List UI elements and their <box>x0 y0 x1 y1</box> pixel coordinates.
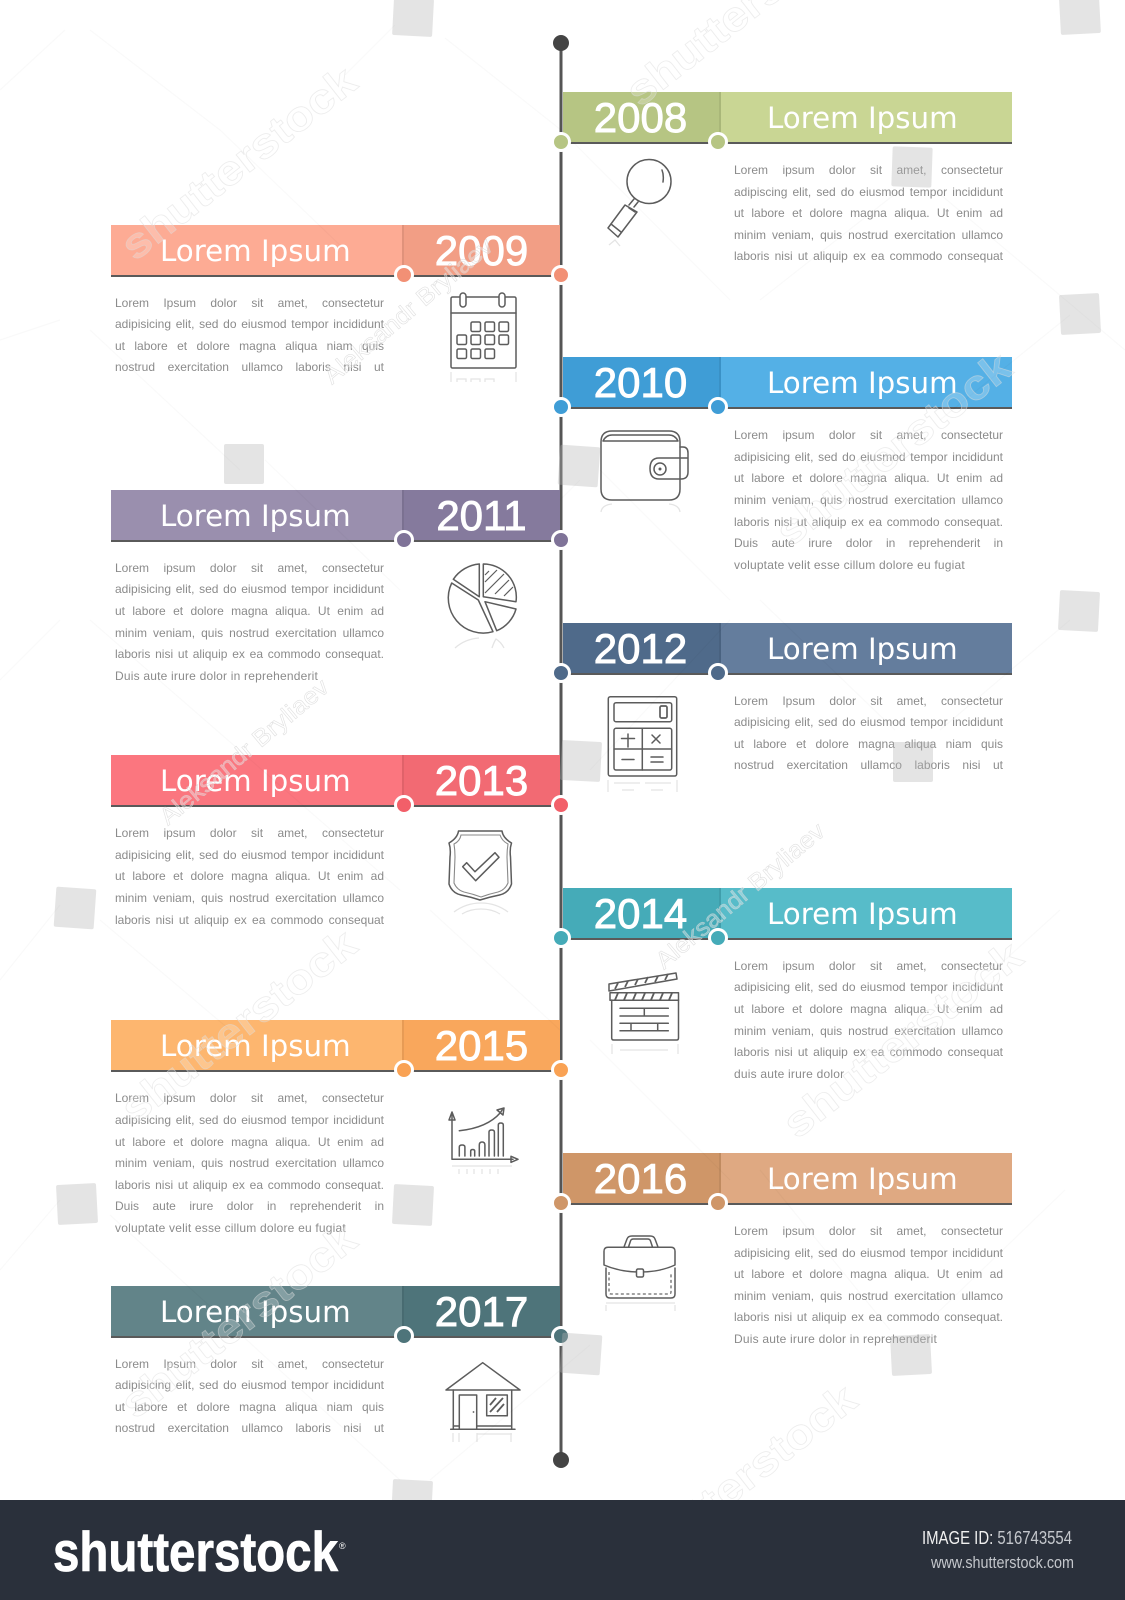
2015 body text: ut labore et dolore magna aliqua. Ut enim ad <box>115 1135 384 1149</box>
2015 divider marker <box>394 1060 414 1080</box>
2010 body text: minim veniam, quis nostrud exercitation ullamco <box>734 493 1003 507</box>
2016 axis marker <box>551 1193 571 1213</box>
2010 header band <box>562 357 1012 409</box>
2010 body text: laboris nisi ut aliquip ex ea commodo consequat. <box>734 515 1003 529</box>
2014 body text: adipisicing elit, sed do eiusmod tempor incididunt <box>734 980 1003 994</box>
2015 header band <box>110 1020 560 1072</box>
2009 body text: Lorem Ipsum dolor sit amet, consectetur <box>115 296 384 310</box>
2011 header band: 2011 <box>436 492 527 539</box>
2013 body text <box>115 826 384 927</box>
icon: calendar <box>450 292 517 382</box>
2015 body text: Duis aute irure dolor in reprehenderit in <box>115 1199 384 1213</box>
2017 divider marker <box>394 1326 414 1346</box>
2010 body text <box>734 428 1003 572</box>
2017 axis marker <box>551 1326 571 1346</box>
2017 body text: ut labore et dolore magna aliqua niam quis <box>115 1400 384 1414</box>
2011 header band <box>110 490 560 542</box>
watermark wordmarks: shutterstock <box>774 931 1032 1147</box>
2011 divider marker <box>394 530 414 550</box>
2011 body text: ut labore et dolore magna aliqua. Ut enim ad <box>115 604 384 618</box>
2014 body text: duis aute irure dolor <box>734 1067 844 1081</box>
2008 body text: ut labore et dolore magna aliqua. Ut enim ad <box>734 206 1003 220</box>
2016 header band: 2016 <box>594 1155 687 1202</box>
2008 header band: 2008 <box>594 94 687 141</box>
2012 body text: Lorem Ipsum dolor sit amet, consectetur <box>734 694 1003 708</box>
panel: 2013 <box>111 755 568 927</box>
2008 header band: Lorem Ipsum <box>767 101 958 135</box>
watermark author names: Aleksandr Bryliaev <box>651 818 830 975</box>
2016 body text: laboris nisi ut aliquip ex ea commodo consequat. <box>734 1310 1003 1324</box>
2017 body text: Lorem Ipsum dolor sit amet, consectetur <box>115 1357 384 1371</box>
2012 body text: nostrud exercitation ullamco laboris nisi ut <box>734 758 1003 772</box>
2009 divider marker <box>394 265 414 285</box>
2014 body text: ut labore et dolore magna aliqua. Ut enim ad <box>734 1002 1003 1016</box>
2008 body text: laboris nisi ut aliquip ex ea commodo consequat <box>734 249 1003 263</box>
2009 body text: nostrud exercitation ullamco laboris nisi ut <box>115 360 384 374</box>
2017 body text: adipisicing elit, sed do eiusmod tempor incididunt <box>115 1378 384 1392</box>
image id: IMAGE ID: 516743554 <box>922 1528 1072 1548</box>
2015 axis marker <box>551 1060 571 1080</box>
2014 body text: minim veniam, quis nostrud exercitation ullamco <box>734 1024 1003 1038</box>
2012 body text: adipisicing elit, sed do eiusmod tempor incididunt <box>734 715 1003 729</box>
2008 body text: adipiscing elit, sed do eiusmod tempor incididunt <box>734 185 1003 199</box>
watermark wordmarks: shutterstock <box>112 919 366 1132</box>
2009 axis marker <box>551 265 571 285</box>
2016 body text: Lorem ipsum dolor sit amet, consectetur <box>734 1224 1003 1238</box>
panel: 2010 <box>554 357 1012 572</box>
2010 body text: ut labore et dolore magna aliqua. Ut enim ad <box>734 471 1003 485</box>
2008 divider marker <box>708 132 728 152</box>
2014 body text <box>734 959 1003 1081</box>
2012 header band: 2012 <box>594 624 687 672</box>
2015 body text: voluptate velit esse cillum dolore eu fugiat <box>115 1221 346 1235</box>
2013 body text: Lorem ipsum dolor sit amet, consectetur <box>115 826 384 840</box>
2017 body text: nostrud exercitation ullamco laboris nisi ut <box>115 1421 384 1435</box>
2016 body text <box>734 1224 1003 1346</box>
icon: calculator <box>608 696 678 792</box>
2015 header band: Lorem Ipsum <box>160 1029 351 1063</box>
watermark author names <box>155 233 830 975</box>
2009 body text: ut labore et dolore magna aliqua niam quis <box>115 339 384 353</box>
panel: 2015 <box>111 1020 568 1235</box>
2013 body text: minim veniam, quis nostrud exercitation ullamco <box>115 891 384 905</box>
2010 body text: Lorem ipsum dolor sit amet, consectetur <box>734 428 1003 442</box>
panel: 2016 <box>554 1153 1012 1346</box>
2016 divider marker <box>708 1193 728 1213</box>
2010 header band: Lorem Ipsum <box>767 366 958 400</box>
icon: film clapperboard <box>608 972 680 1054</box>
footer logo: ® <box>339 1541 346 1551</box>
icon: wallet <box>600 430 689 512</box>
watermark author names: Aleksandr Bryliaev <box>319 233 498 390</box>
2010 body text: adipisicing elit, sed do eiusmod tempor incididunt <box>734 450 1003 464</box>
2015 body text <box>115 1091 384 1235</box>
2008 body text <box>734 163 1003 263</box>
2011 body text: adipisicing elit, sed do eiusmod tempor incididunt <box>115 582 384 596</box>
2014 header band <box>562 888 1012 940</box>
2013 axis marker <box>551 795 571 815</box>
2008 body text: minim veniam, quis nostrud exercitation ullamco <box>734 228 1003 242</box>
2009 body text <box>115 296 384 374</box>
icon: house <box>445 1362 521 1442</box>
panel: 2009 <box>111 225 568 374</box>
2010 header band: 2010 <box>594 359 687 406</box>
2015 body text: minim veniam, quis nostrud exercitation ullamco <box>115 1156 384 1170</box>
2015 body text: laboris nisi ut aliquip ex ea commodo consequat. <box>115 1178 384 1192</box>
2012 axis marker <box>551 662 571 682</box>
2015 body text: adipisicing elit, sed do eiusmod tempor incididunt <box>115 1113 384 1127</box>
2008 body text: Lorem ipsum dolor sit amet, consectetur <box>734 163 1003 177</box>
panel: 2011 <box>111 490 568 683</box>
2014 axis marker <box>551 928 571 948</box>
2015 header band: 2015 <box>435 1022 528 1069</box>
icon: growth chart <box>448 1107 519 1174</box>
2010 divider marker <box>708 397 728 417</box>
icon: pie chart <box>448 563 518 648</box>
icon: magnifier <box>607 158 672 246</box>
panel: 2014 <box>554 888 1012 1081</box>
2010 body text: Duis aute irure dolor in reprehenderit in <box>734 536 1003 550</box>
2016 body text: adipisicing elit, sed do eiusmod tempor incididunt <box>734 1246 1003 1260</box>
2011 header band: Lorem Ipsum <box>160 499 351 533</box>
2013 body text: adipisicing elit, sed do eiusmod tempor incididunt <box>115 848 384 862</box>
timeline axis <box>553 35 569 1468</box>
2017 body text <box>115 1357 384 1435</box>
2013 divider marker <box>394 795 414 815</box>
2008 header band <box>562 92 1012 144</box>
2013 header band: Lorem Ipsum <box>160 764 351 798</box>
footer bar <box>0 1500 1125 1600</box>
watermark wordmarks: shutterstock <box>112 1214 366 1427</box>
panel: 2008 <box>554 92 1012 263</box>
2011 body text <box>115 561 384 683</box>
2009 header band: 2009 <box>435 227 528 274</box>
2012 body text <box>734 694 1003 772</box>
2010 body text: voluptate velit esse cillum dolore eu fugiat <box>734 558 965 572</box>
2017 header band: Lorem Ipsum <box>160 1295 351 1329</box>
2016 body text: minim veniam, quis nostrud exercitation ullamco <box>734 1289 1003 1303</box>
2010 axis marker <box>551 397 571 417</box>
2014 header band: Lorem Ipsum <box>767 897 958 931</box>
2017 header band: 2017 <box>435 1288 528 1335</box>
2011 body text: Lorem ipsum dolor sit amet, consectetur <box>115 561 384 575</box>
2009 header band <box>110 225 560 277</box>
panel: 2017 <box>111 1286 568 1435</box>
2016 header band <box>562 1153 1012 1205</box>
2011 body text: minim veniam, quis nostrud exercitation ullamco <box>115 626 384 640</box>
2013 header band: 2013 <box>435 757 528 804</box>
2011 body text: laboris nisi ut aliquip ex ea commodo consequat. <box>115 647 384 661</box>
2013 body text: laboris nisi ut aliquip ex ea commodo consequat <box>115 913 384 927</box>
2014 body text: Lorem ipsum dolor sit amet, consectetur <box>734 959 1003 973</box>
2012 divider marker <box>708 662 728 682</box>
watermark wordmarks: shutterstock <box>112 56 366 269</box>
2013 header band <box>110 755 560 807</box>
2016 header band: Lorem Ipsum <box>767 1162 958 1196</box>
2015 body text: Lorem ipsum dolor sit amet, consectetur <box>115 1091 384 1105</box>
2008 axis marker <box>551 132 571 152</box>
watermark author names: Aleksandr Bryliaev <box>155 674 334 831</box>
2014 divider marker <box>708 928 728 948</box>
2009 header band: Lorem Ipsum <box>160 234 351 268</box>
watermark wordmarks: shutterstock <box>767 342 1021 555</box>
2017 header band <box>110 1286 560 1338</box>
2011 axis marker <box>551 530 571 550</box>
2012 header band <box>562 622 1012 674</box>
2012 body text: ut labore et dolore magna aliqua niam quis <box>734 737 1003 751</box>
2009 body text: adipisicing elit, sed do eiusmod tempor incididunt <box>115 317 384 331</box>
2013 body text: ut labore et dolore magna aliqua. Ut enim ad <box>115 869 384 883</box>
2011 body text: Duis aute irure dolor in reprehenderit <box>115 669 318 683</box>
2016 body text: Duis aute irure dolor in reprehenderit <box>734 1332 937 1346</box>
panel: 2012 <box>554 623 1012 772</box>
2014 header band: 2014 <box>594 890 687 937</box>
icon: briefcase <box>603 1235 676 1311</box>
2012 header band: Lorem Ipsum <box>767 632 958 666</box>
2014 body text: laboris nisi ut aliquip ex ea commodo consequat <box>734 1045 1003 1059</box>
2016 body text: ut labore et dolore magna aliqua. Ut enim ad <box>734 1267 1003 1281</box>
icon: shield with check <box>448 830 512 914</box>
